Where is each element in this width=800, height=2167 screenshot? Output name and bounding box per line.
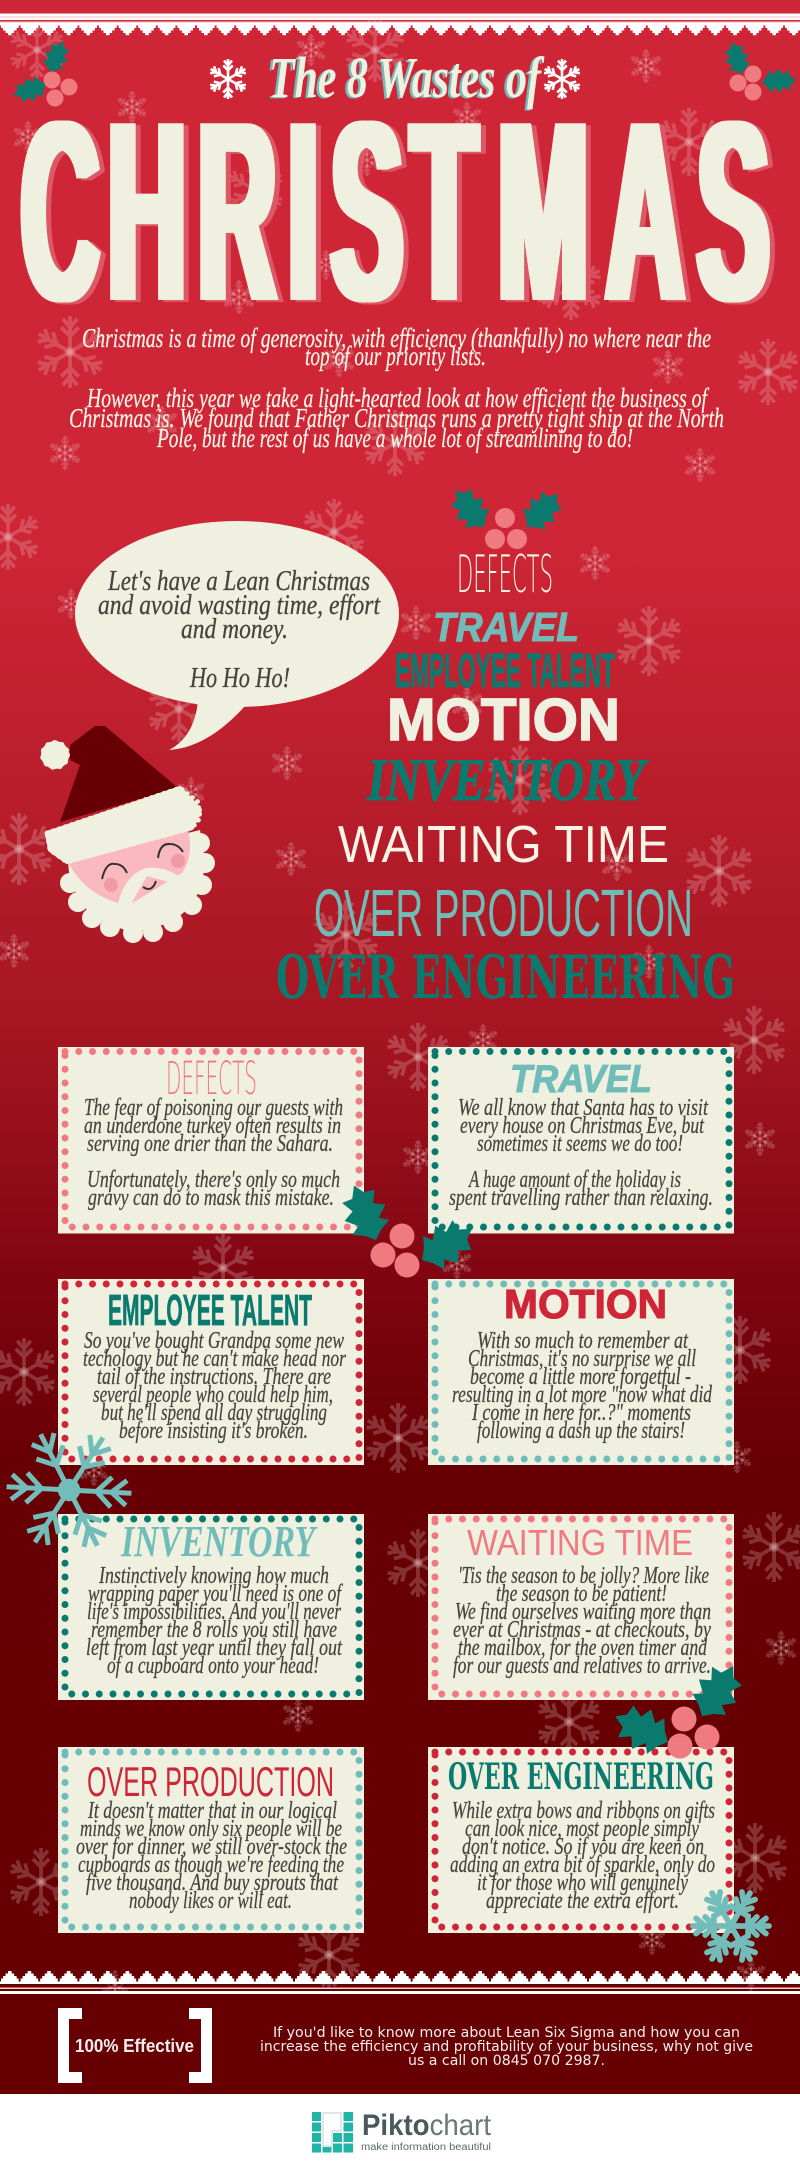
- word list of wastes: INVENTORY: [366, 747, 649, 813]
- panel: employee talent: but he'll spend all day struggling: [101, 1400, 327, 1426]
- icon: holly top left: [9, 36, 78, 108]
- panel: motion: MOTION: [504, 1281, 667, 1327]
- panel: defects: serving one drier than the Sahara.: [87, 1131, 333, 1157]
- icon: santa: [41, 726, 215, 943]
- panel: over engineering: it for those who will genuinely: [477, 1870, 688, 1896]
- panel: waiting time: ever at Christmas - at checkouts, by: [453, 1617, 711, 1643]
- panel: over production: OVER PRODUCTION: [87, 1758, 334, 1805]
- panel: inventory: remember the 8 rolls you still have: [91, 1617, 337, 1643]
- footer band: increase the efficiency and profitability of your business, why not give: [260, 2039, 753, 2055]
- speech bubble: Ho Ho Ho!: [189, 663, 290, 694]
- icon: holly above word list: [442, 480, 571, 549]
- panel: over engineering: [428, 1747, 734, 1933]
- icon: teal snowflake on over engineering panel: [693, 1889, 769, 1963]
- panel: inventory: wrapping paper you'll need is one of: [88, 1581, 343, 1607]
- panel: motion: [428, 1279, 734, 1465]
- panel: over engineering: appreciate the extra effort.: [486, 1888, 679, 1914]
- panel: defects: The fear of poisoning our guests with: [84, 1095, 343, 1121]
- panel: waiting time: WAITING TIME: [467, 1522, 693, 1563]
- panel: travel: sometimes it seems we do too!: [477, 1131, 683, 1157]
- panel: inventory: life's impossibilities. And you'll never: [87, 1599, 341, 1625]
- speech bubble: and avoid wasting time, effort: [98, 590, 381, 621]
- panel: defects: an underdone turkey often results in: [84, 1113, 341, 1139]
- panel: waiting time: We find ourselves waiting more than: [455, 1599, 711, 1625]
- word list of wastes: TRAVEL: [433, 604, 579, 650]
- word list of wastes: DEFECTS: [457, 545, 553, 605]
- panel: employee talent: tail of the instructions. There are: [97, 1364, 331, 1390]
- panel: over production: It doesn't matter that in our logical: [87, 1798, 337, 1824]
- panel: defects: Unfortunately, there's only so much: [87, 1167, 340, 1193]
- footer band: If you'd like to know more about Lean Six Sigma and how you can: [273, 2025, 740, 2041]
- speech bubble: Let's have a Lean Christmas: [107, 566, 370, 597]
- panel: inventory: INVENTORY: [120, 1517, 318, 1566]
- panel: motion: resulting in a lot more "now what did: [452, 1382, 713, 1408]
- word list of wastes: [276, 545, 735, 1013]
- panel: travel: [428, 1047, 734, 1234]
- icon: white snowflake left of title: [208, 59, 248, 99]
- panel: over engineering: can look nice, most people simply: [465, 1816, 699, 1842]
- icon: holly top right: [720, 38, 798, 100]
- piktochart logo: [312, 2109, 492, 2153]
- panel: inventory: Instinctively knowing how much: [98, 1563, 329, 1589]
- icon: holly on waiting time panel: [606, 1654, 752, 1762]
- panel: employee talent: before insisting it's broken.: [119, 1418, 308, 1444]
- panel: travel: A huge amount of the holiday is: [468, 1167, 681, 1193]
- top bunting strip: [0, 14, 800, 35]
- panel: waiting time: the mailbox, for the oven timer and: [458, 1635, 708, 1661]
- piktochart logo: make information beautiful: [361, 2141, 491, 2153]
- word list of wastes: MOTION: [387, 687, 620, 753]
- panel: waiting time: 'Tis the season to be jolly? More like: [458, 1563, 709, 1589]
- panel: inventory: left from last year until they fall out: [86, 1635, 343, 1661]
- icon: white snowflake right of title: [542, 59, 582, 99]
- title: CHRISTMAS: [21, 68, 769, 355]
- panel: travel: We all know that Santa has to visit: [458, 1095, 709, 1121]
- footer band: 100% Effective: [75, 2036, 194, 2056]
- panel: motion: With so much to remember at: [477, 1328, 689, 1354]
- panel: defects: [58, 1047, 364, 1234]
- panel: inventory: [58, 1514, 364, 1700]
- panel: motion: become a little more forgetful -: [470, 1364, 691, 1390]
- icon: teal snowflake between employee talent and inventory: [3, 1425, 135, 1555]
- panel: travel: every house on Christmas Eve, but: [460, 1113, 705, 1139]
- panel: over production: five thousand. And buy sprouts that: [86, 1870, 339, 1896]
- intro text: top of our priority lists.: [305, 341, 486, 371]
- panel: employee talent: EMPLOYEE TALENT: [108, 1286, 312, 1335]
- panel: motion: following a dash up the stairs!: [477, 1418, 685, 1444]
- panel: over production: nobody likes or will eat.: [129, 1888, 292, 1914]
- intro text: [69, 323, 724, 453]
- white footer: [0, 2094, 800, 2167]
- panel: over production: [58, 1747, 364, 1933]
- footer band: us a call on 0845 070 2987.: [408, 2053, 605, 2069]
- speech bubble: and money.: [181, 614, 288, 645]
- word list of wastes: WAITING TIME: [338, 816, 669, 874]
- panel: employee talent: several people who could help him,: [93, 1382, 333, 1408]
- panel: employee talent: techology but he can't make head nor: [83, 1346, 346, 1372]
- subtitle: The 8 Wastes of: [269, 45, 545, 110]
- panel: over production: cupboards as though we're feeding the: [78, 1852, 344, 1878]
- panel: over engineering: don't notice. So if you are keen on: [462, 1834, 704, 1860]
- panel: waiting time: the season to be patient!: [496, 1581, 667, 1607]
- panel: travel: TRAVEL: [510, 1058, 652, 1101]
- panel: over production: minds we know only six people will be: [80, 1816, 342, 1842]
- icon: holly between defects and travel: [334, 1177, 484, 1279]
- panel: defects: DEFECTS: [166, 1052, 257, 1105]
- panel: waiting time: [428, 1514, 734, 1700]
- panel: defects: gravy can do to mask this mistake.: [88, 1185, 334, 1211]
- panel: over production: over for dinner, we still over-stock the: [76, 1834, 347, 1860]
- speech bubble: [75, 521, 399, 750]
- panel: motion: I come in here for..?" moments: [471, 1400, 691, 1426]
- panel: motion: Christmas, it's no surprise we all: [468, 1346, 696, 1372]
- panel: employee talent: So you've bought Grandpa some new: [84, 1328, 344, 1354]
- footer band: [0, 1994, 800, 2094]
- panel: employee talent: [58, 1279, 364, 1465]
- panel: travel: spent travelling rather than relaxing.: [449, 1185, 713, 1211]
- panel: inventory: of a cupboard onto your head!: [107, 1653, 319, 1679]
- bottom bunting strip: [0, 1971, 800, 1994]
- piktochart logo: Piktochart: [362, 2109, 492, 2142]
